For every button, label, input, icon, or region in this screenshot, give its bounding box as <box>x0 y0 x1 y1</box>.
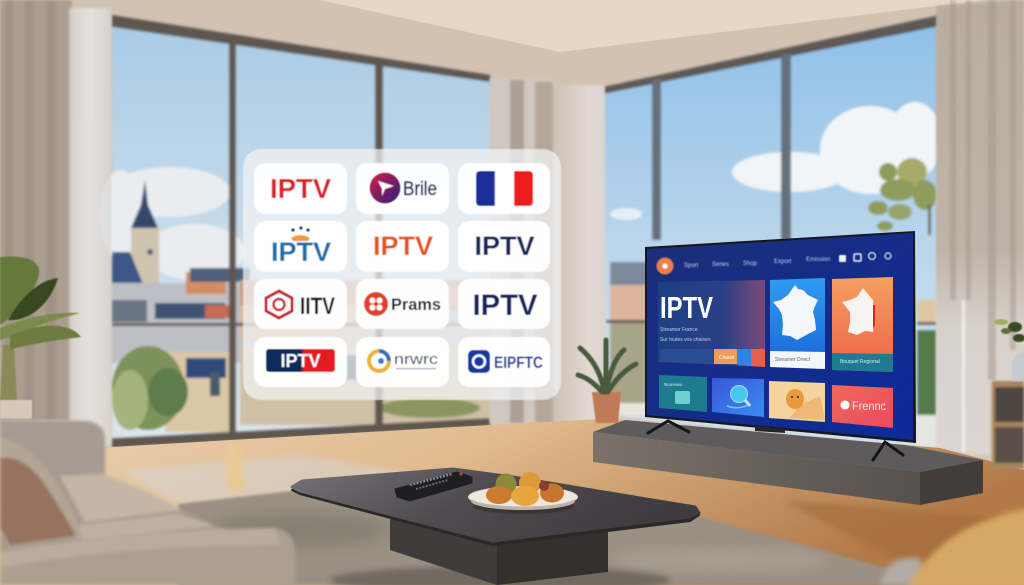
logo tile: IPTV navy <box>458 221 550 272</box>
TV red tile <box>832 385 893 428</box>
hero subtitle: Streamer France <box>660 327 698 333</box>
left sofa <box>0 420 295 585</box>
logo tile: IPTV bar <box>254 337 347 387</box>
TV top navigation: Export <box>774 259 792 265</box>
coffee table <box>292 469 699 585</box>
logo tile: IPTV orange: IPTV <box>373 231 433 261</box>
potted plant at left <box>0 256 81 419</box>
tree in left window <box>112 346 188 430</box>
TV stand <box>593 420 983 505</box>
cloud <box>610 102 942 220</box>
cloud behind tower <box>100 167 245 280</box>
TV top navigation: Sport <box>684 263 699 269</box>
table edge <box>292 490 699 545</box>
table top <box>292 469 699 541</box>
logo tile: Brile: Brile <box>403 179 437 200</box>
plate of fruit <box>468 472 578 514</box>
hero caption: Sur toutes vos chaines <box>660 337 711 343</box>
right window with sky and trees <box>603 15 942 450</box>
sofa base <box>0 470 295 585</box>
right side cabinet <box>992 381 1024 469</box>
TV teal tile <box>659 375 707 412</box>
logo tile: hexagon IITV: IITV <box>300 293 335 320</box>
logo tile: nrwrc: nrwrc <box>394 351 439 368</box>
TV legs <box>648 421 903 460</box>
TV blue card with map of France: Streamer Direct <box>775 357 811 363</box>
logo tile: IPTV navy large: IPTV <box>472 289 538 322</box>
remote control <box>395 472 472 501</box>
center sheer and pillar <box>490 78 605 423</box>
church tower <box>112 180 159 298</box>
logo tile: Prams <box>356 279 449 329</box>
TV bezel <box>645 231 916 443</box>
TV red tile: Frennc <box>852 399 886 413</box>
city buildings <box>112 268 492 432</box>
TV top navigation <box>656 253 891 274</box>
logo panel <box>243 149 561 400</box>
TV orange card with map of France <box>832 277 893 372</box>
pillow <box>0 437 83 545</box>
logo tile: IPTV red: IPTV <box>270 173 332 204</box>
table shadow <box>330 566 670 585</box>
left window with city view <box>100 15 492 448</box>
hero title: IPTV <box>660 290 713 325</box>
TV blue card with map of France <box>770 278 825 369</box>
TV top navigation: Series <box>712 262 729 268</box>
plant on cabinet with vase <box>994 319 1024 381</box>
TV blue search tile <box>712 378 764 417</box>
logo tile: EIPFTC: EIPFTC <box>494 353 543 372</box>
logo tile: hexagon IITV <box>254 279 347 329</box>
logo tile: IPTV blue with crown <box>254 221 347 272</box>
TV teal tile: Nouveau <box>664 382 683 387</box>
floor light reflections <box>120 445 1024 560</box>
logo tile: EIPFTC <box>458 337 550 387</box>
TV cream tile with character <box>769 381 825 422</box>
left curtains <box>0 0 111 446</box>
tree upper right <box>868 158 937 235</box>
rug <box>178 490 915 585</box>
TV top navigation: Emission <box>806 257 830 263</box>
TV top navigation: Shop <box>743 261 758 267</box>
logo tile: IPTV blue with crown: IPTV <box>271 237 331 267</box>
table base <box>390 505 497 585</box>
window frame left <box>112 15 490 448</box>
logo tile: IPTV orange <box>356 221 449 272</box>
TV screen <box>647 233 913 440</box>
logo tile: Prams: Prams <box>391 295 441 314</box>
logo tile: IPTV navy: IPTV <box>474 231 535 261</box>
sofa front arm <box>0 528 295 585</box>
logo tile: nrwrc <box>356 337 449 387</box>
sofa cushion top <box>60 474 182 522</box>
right curtain <box>936 0 1024 455</box>
logo tile: IPTV bar: IPTV <box>280 351 321 371</box>
potted plant near pillar <box>578 340 636 423</box>
logo tile: IPTV red <box>254 163 347 214</box>
wooden floor <box>0 419 1024 585</box>
logo tile: IPTV navy large <box>458 279 550 329</box>
logo tile: French flag <box>458 163 550 214</box>
city right <box>610 262 937 445</box>
logo tile: Brile <box>356 163 449 214</box>
television <box>645 231 916 460</box>
foreground right cushion <box>880 508 1024 585</box>
TV orange card with map of France: Bouquet Regional <box>840 359 880 365</box>
TV hero panel: Choisir <box>719 355 735 361</box>
sofa cushion lower <box>80 514 215 540</box>
sofa back arm <box>0 420 105 490</box>
window frame right <box>603 15 940 325</box>
TV hero panel <box>658 280 765 367</box>
